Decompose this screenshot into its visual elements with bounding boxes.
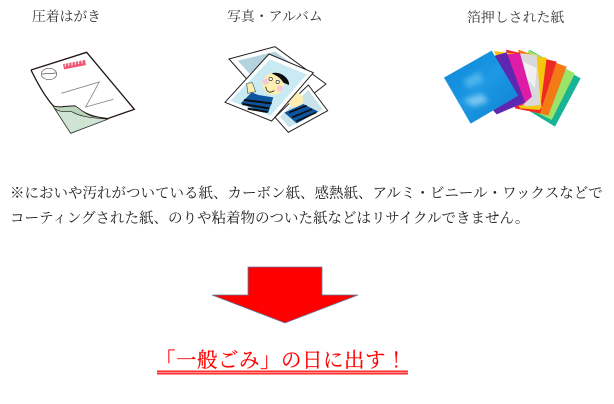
- heading: photos and albums: 写真・アルバム: [227, 10, 323, 25]
- arrow: red down arrow: [212, 267, 358, 323]
- note text block: ※においや汚れがついている紙、カーボン紙、感熱紙、アルミ・ビニール・ワックスなどで: [10, 186, 603, 202]
- icon: postcard: [31, 52, 134, 133]
- heading: foil-stamped paper: 箔押しされた紙: [467, 11, 564, 26]
- heading: pressure-sealed postcard: 圧着はがき: [32, 9, 101, 24]
- note text block: コーティングされた紙、のりや粘着物のついた紙などはリサイクルできません。: [10, 211, 529, 227]
- callout: put out on general waste day: 「一般ごみ」の日に出す！: [155, 350, 407, 372]
- note text block: [10, 185, 603, 227]
- icon: photographs: [225, 47, 328, 132]
- icon: foil sheets fan: [444, 50, 581, 127]
- double underline: [157, 370, 408, 374]
